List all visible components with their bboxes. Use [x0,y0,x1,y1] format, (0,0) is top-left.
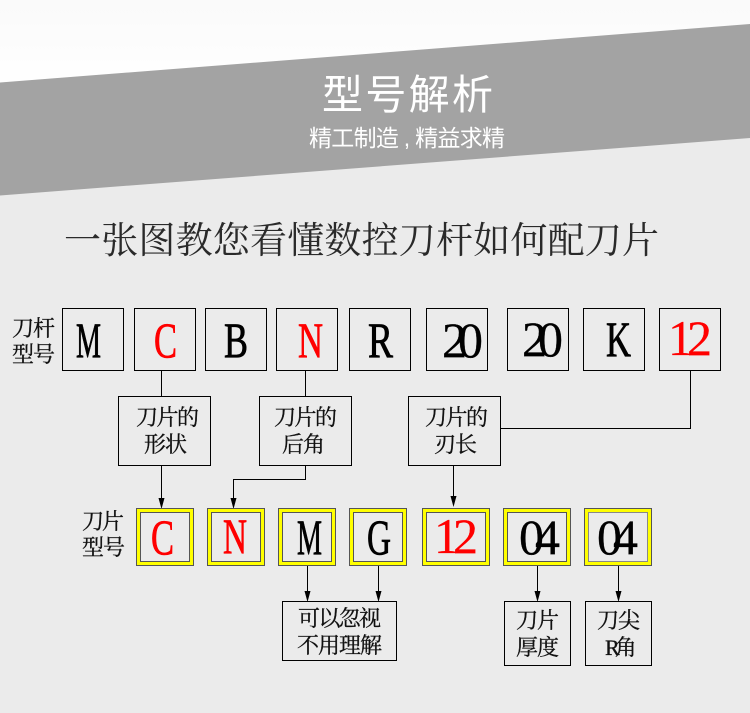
label: insert edge length: 刀片的 [425,405,488,430]
note: can be ignored: 不用理解 [297,633,382,658]
insert box G: G [367,509,391,565]
insert box 12: 12 [434,508,476,564]
insert box C [136,508,194,566]
diagonal header band [0,24,750,196]
arrow: edge length to 12 [450,466,456,507]
note: nose radius [586,602,652,666]
code box N [276,308,338,370]
insert box N: N [223,508,247,564]
holder code row [62,308,720,370]
label: insert shape [118,396,210,466]
row label: holder model: 刀杆 [12,316,55,341]
code box B: B [224,312,248,368]
insert box M [278,508,336,566]
insert code row [136,508,652,566]
note: nose radius: 刀尖 [597,608,640,633]
label: insert relief angle [260,396,352,466]
row label: insert model: 型号 [82,535,125,560]
arrow: 04 to nose radius [616,566,622,602]
code box K [584,308,644,370]
note: insert thickness [504,602,570,666]
code box K: K [606,311,631,367]
insert box 04 second [584,508,652,566]
label: insert edge length: 刃长 [434,432,477,457]
code box 20 second [508,308,568,370]
label: insert shape: 刀片的 [136,405,199,430]
white top background [0,0,750,90]
code box 12 [660,308,720,370]
note: can be ignored: 可以忽视 [298,606,381,631]
insert box N [208,508,264,566]
arrow: M to ignore note [304,566,310,602]
code box 20: 20 [442,312,482,368]
note: can be ignored [282,602,396,660]
code box R [350,308,410,370]
row label: insert model: 刀片 [82,509,124,534]
insert box 04 [504,508,570,566]
arrow: G to ignore note [376,566,382,602]
code box 20 [426,308,488,370]
note: insert thickness: 刀片 [516,608,559,633]
row label: holder model [12,316,55,367]
arrow: shape to C [158,466,164,509]
connector: C to shape [160,371,162,396]
code box B [206,308,266,370]
connector: 12 to edge length [501,371,690,428]
label: insert edge length [408,396,500,466]
arrow: 04 to thickness [534,566,540,602]
code box C: C [154,312,177,368]
insert box C: C [151,509,174,565]
note: nose radius: R角 [605,635,635,660]
label: insert shape: 形状 [144,432,187,457]
heading: 型号解析 [322,72,493,118]
label: insert relief angle: 刀片的 [274,405,337,430]
code box N: N [298,312,323,368]
code box 12: 12 [668,310,710,366]
connector: N to relief angle [304,371,306,396]
note: insert thickness: 厚度 [516,635,559,660]
code box R: R [368,312,393,368]
insert box 04: 04 [519,509,560,565]
code box M: M [76,312,101,368]
arrow: relief angle to N [230,466,306,509]
insert box G [350,508,406,566]
insert box 12 [422,508,490,566]
code box C [134,308,196,370]
insert box M: M [297,509,322,565]
insert box 04 second: 04 [597,509,638,565]
main title: 一张图教您看懂数控刀杆如何配刀片 [64,220,659,262]
label: insert relief angle: 后角 [282,432,325,457]
row label: holder model: 型号 [12,342,55,367]
code box M [62,308,124,370]
code box 20 second: 20 [522,311,562,367]
row label: insert model [82,509,125,560]
subheading: 精工制造 , 精益求精 [309,125,505,151]
